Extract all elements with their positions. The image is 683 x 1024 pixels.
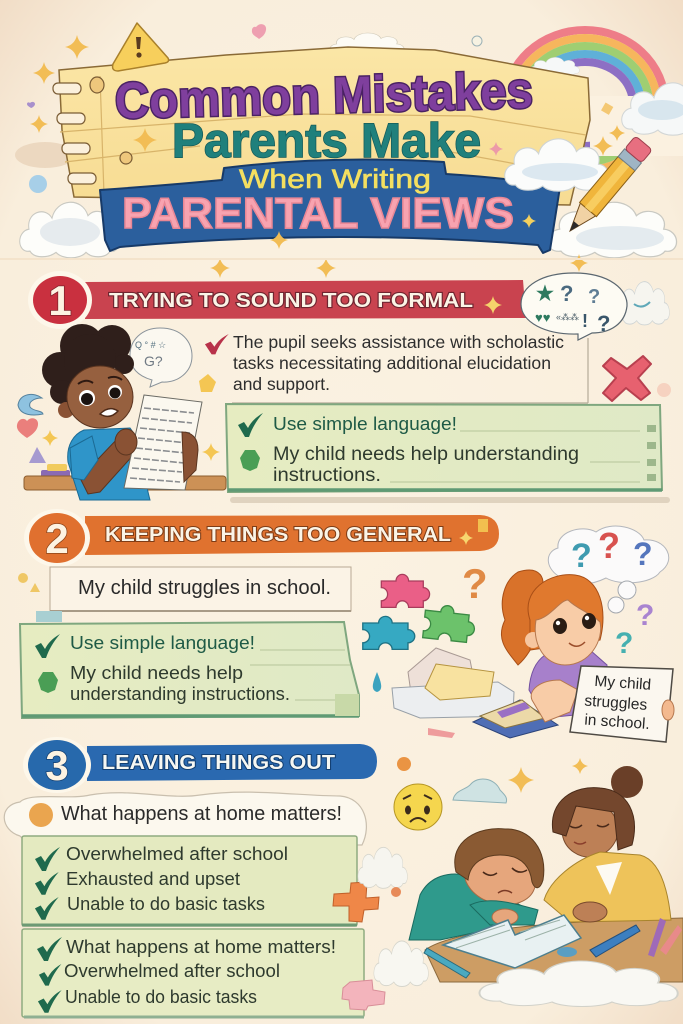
cover below rainbow (590, 96, 683, 156)
title line 1: Common Mistakes (114, 61, 534, 129)
sleeve (70, 436, 98, 480)
boy (409, 829, 544, 940)
mistake example text: and support. (233, 374, 330, 394)
cloud right lower (548, 202, 677, 258)
face (58, 366, 133, 428)
green list box 1: Exhausted and upset (66, 868, 240, 889)
pencils and eraser (424, 918, 682, 978)
boy's thought bubble (130, 328, 192, 387)
decorative stars and hearts (27, 24, 625, 193)
red X mark (603, 356, 651, 401)
rear cloud (330, 33, 404, 56)
cloud callout: What happens at home matters! (61, 803, 342, 825)
ponytail (501, 570, 543, 665)
mistake example text: The pupil seeks assistance with scholastic (233, 332, 564, 352)
thought cloud with question marks: ? (598, 525, 620, 566)
teal tape (36, 611, 62, 622)
thought cloud with question marks: ? (571, 537, 592, 575)
small cloud icon (453, 779, 507, 803)
speech bubble with symbols: ♥♥ (535, 310, 551, 325)
crumpled papers (392, 648, 514, 718)
number badge 2: 2 (45, 515, 69, 562)
divider stars (0, 254, 683, 278)
cloud right upper (505, 139, 609, 191)
number badge 2 (24, 509, 90, 567)
cloud left of table (374, 941, 428, 986)
green tip box 2: understanding instructions. (70, 683, 290, 704)
thought cloud with question marks (548, 525, 669, 613)
number badge 3 (23, 737, 91, 793)
background left smudge (15, 142, 75, 168)
mother's hand (573, 902, 607, 922)
ribbon heading 3 (87, 744, 377, 781)
tip text: My child needs help understanding (273, 444, 579, 465)
green list box 1 (22, 836, 357, 926)
title banner (100, 160, 560, 253)
ribbon heading 1: TRYING TO SOUND TOO FORMAL (109, 290, 473, 312)
decorative dots left (18, 573, 40, 592)
table (425, 918, 683, 982)
illustration: tired boy and mother (374, 766, 683, 1006)
sad icon (29, 803, 53, 827)
hands (115, 429, 137, 455)
green list box 2: What happens at home matters! (66, 936, 336, 957)
hair cap (528, 575, 603, 650)
thought cloud with question marks: ? (633, 536, 653, 572)
sign with text (570, 666, 673, 742)
section 1: trying to sound too formal (17, 271, 671, 503)
mistake example text (205, 332, 588, 403)
speech bubble with symbols: ? (588, 286, 600, 308)
notepad paper (53, 47, 590, 205)
orange plus (333, 882, 379, 922)
mistake example text: tasks necessitating additional elucidation (233, 353, 551, 373)
shadow strip (230, 497, 670, 503)
extra question marks: ? (615, 627, 633, 660)
ribbon heading 3: LEAVING THINGS OUT (102, 752, 335, 774)
orange question mark: ? (462, 560, 488, 607)
puzzle pieces (363, 574, 476, 649)
sheet of paper (124, 395, 202, 490)
sign with text: in school. (584, 712, 650, 733)
gem bullet (240, 450, 260, 471)
open book (443, 915, 581, 968)
speech bubble with symbols (521, 273, 627, 340)
check icon (35, 634, 60, 658)
boy's thought bubble: G? (144, 353, 163, 369)
title line 4: PARENTAL VIEWS (122, 189, 514, 238)
notebook rings (53, 77, 132, 184)
speech bubble with symbols: ? (560, 281, 573, 306)
number badge 3: 3 (45, 742, 69, 789)
section 2: keeping things too general (18, 509, 674, 742)
extra question marks (615, 599, 654, 660)
tip text: My child needs help (70, 662, 243, 683)
blue swirl, heart and triangle (17, 394, 70, 478)
speech bubble with symbols: ★ (536, 283, 554, 305)
water drop (373, 672, 381, 692)
speech bubble with symbols: ! (582, 311, 588, 331)
cloud inside rainbow (530, 57, 579, 76)
vague statement box (50, 567, 351, 611)
face (525, 600, 601, 665)
green tip box 1: instructions. (273, 465, 381, 486)
sign with text: My child (594, 673, 652, 694)
cloud near list (358, 847, 407, 888)
forearm (80, 438, 136, 494)
title line 2: Parents Make (172, 115, 481, 168)
cloud left (20, 202, 119, 258)
extra question marks: ? (636, 599, 654, 632)
sad face emoji (394, 784, 442, 830)
boy's thought bubble: Q ° # ☆ (135, 340, 166, 350)
cloud top right (622, 83, 683, 135)
illustration: girl holding sign (501, 570, 674, 742)
ribbon heading 2: KEEPING THINGS TOO GENERAL (105, 524, 451, 546)
number badge 1 (28, 271, 92, 329)
title line 3: When Writing (239, 164, 431, 194)
green tip box 1 (226, 404, 662, 492)
green list box 2 (22, 929, 364, 1017)
ribbon heading 1 (85, 280, 526, 319)
mother (544, 766, 671, 922)
clouds bottom right (479, 961, 678, 1006)
tip heading: Use simple language! (273, 413, 457, 434)
cloud callout (4, 792, 366, 845)
faint peach heart (657, 383, 671, 397)
ribbon heading 2 (85, 515, 499, 555)
cloud behind bubble (618, 282, 669, 325)
vague statement box: My child struggles in school. (78, 577, 331, 599)
red check (205, 334, 229, 354)
pencil (562, 136, 652, 238)
section 3: leaving things out (4, 737, 683, 1017)
speech bubble with symbols: «⁂⁂ (556, 312, 579, 322)
title area (15, 23, 683, 258)
number badge 1: 1 (48, 277, 72, 324)
illustration: worried boy reading (17, 324, 226, 500)
green tip box 2 (20, 622, 359, 718)
title heading (114, 61, 534, 238)
books and crayons (428, 700, 558, 738)
tip heading: Use simple language! (70, 632, 255, 653)
warning triangle (113, 23, 169, 71)
speech bubble with symbols: ? (597, 311, 610, 336)
desk (24, 476, 226, 490)
green list box 2: Unable to do basic tasks (65, 986, 257, 1007)
body (529, 650, 607, 718)
green list box 2: Overwhelmed after school (64, 960, 280, 981)
yellow stars (42, 374, 220, 461)
sign with text: struggles (584, 693, 648, 714)
hair (42, 324, 134, 404)
rainbow (505, 30, 665, 178)
check icon (238, 413, 263, 437)
sparkle and orange drop (391, 757, 588, 897)
shirt (68, 428, 150, 500)
green list box 1: Unable to do basic tasks (67, 893, 265, 914)
green list box 1: Overwhelmed after school (66, 843, 288, 864)
gem bullet (38, 672, 58, 693)
pink puzzle piece (342, 980, 385, 1010)
